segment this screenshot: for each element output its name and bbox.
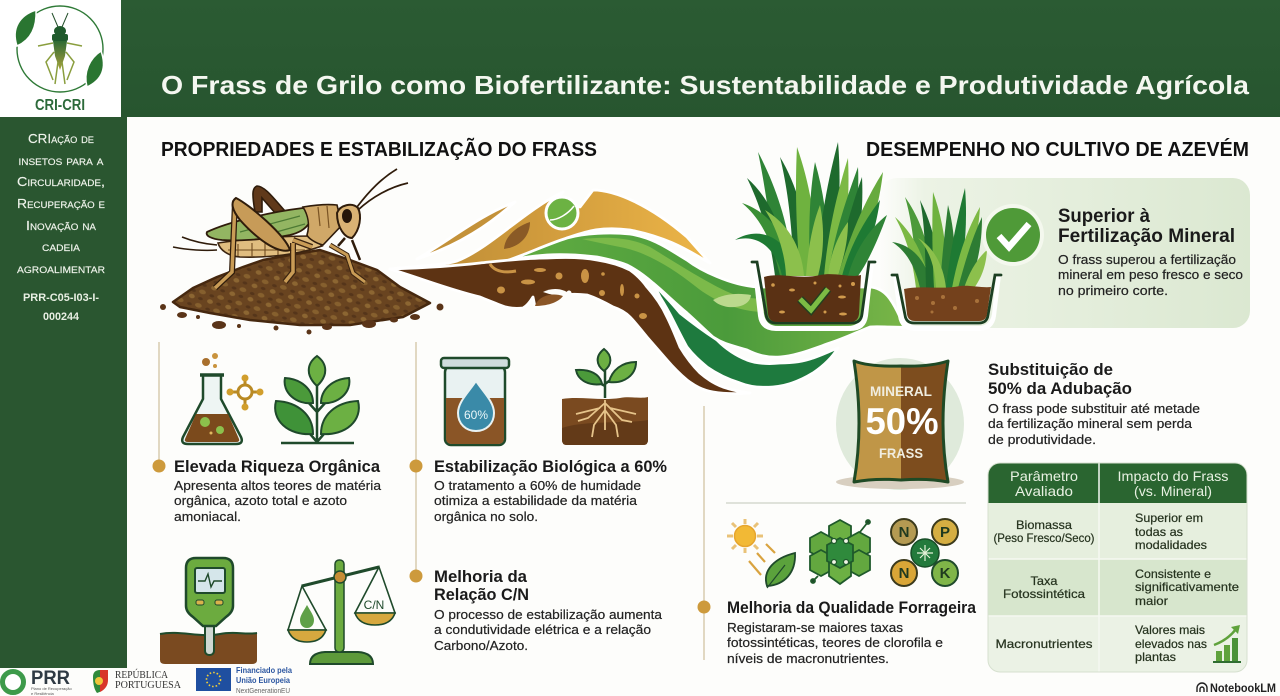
row: macronutrientes: Valores mais [1135,623,1205,637]
icon: plant [275,356,359,443]
panel: superior content [735,142,1243,331]
divider [726,502,966,504]
item: elevada riqueza organica [152,353,382,524]
bullet [410,460,422,472]
icon: balance C/N: C/N [364,598,384,612]
icon: jar with droplet: 60% [464,408,488,422]
row: taxa fotossintetica: Fotossintética [1003,587,1085,601]
text: superior: mineral em peso fresco e seco [1058,267,1243,282]
sidebar text: agroalimentar [17,261,106,276]
text block: O processo de estabilização aumenta [434,607,663,622]
text block: Registaram-se maiores taxas [727,620,904,635]
icon: fertiliser bag: MINERAL [870,383,932,399]
text block: Carbono/Azoto. [434,638,528,653]
sidebar text [17,131,106,323]
text: superior: O frass superou a fertilização [1058,252,1236,267]
icon: fertiliser bag [836,358,964,490]
icon: conductivity meter in soil [160,558,257,664]
heading: properties: PROPRIEDADES E ESTABILIZAÇÃO DO FRASS [161,138,597,161]
table header: (vs. Mineral) [1134,483,1212,499]
illustration: flowing ribbon from frass to plants [390,190,910,394]
icon: rising bars [1213,625,1241,662]
text: superior: Superior à [1058,206,1150,227]
heading: performance: DESEMPENHO NO CULTIVO DE AZEVÉM [866,138,1249,161]
row: biomassa: (Peso Fresco/Seco) [994,531,1094,545]
icon: NPK nutrients: P [940,524,950,541]
sidebar text: cadeia [42,239,80,254]
row: biomassa: Biomassa [1016,518,1072,532]
icon: NPK nutrients: K [940,565,951,582]
table header: Impacto do Frass [1118,468,1228,484]
text block: Apresenta altos teores de matéria [174,478,382,493]
text block: otimiza a estabilidade da matéria [434,493,638,508]
logo: Republica Portuguesa: REPÚBLICA [115,669,168,681]
text block [174,457,382,524]
row: taxa fotossintetica: significativamente [1135,580,1239,594]
text block: 50% da Adubação [988,379,1132,398]
text block [434,457,667,524]
text block: fotossintéticas, teores de clorofila e [727,635,943,650]
title: O Frass de Grilo como Biofertilizante: Sustentabilidade e Produtividade Agrícola [161,70,1250,100]
text block: O tratamento a 60% de humidade [434,478,641,493]
text block: orgânica no solo. [434,509,538,524]
row: macronutrientes [996,623,1207,664]
item: substituicao 50% [836,358,1200,490]
logo: EU flag: União Europeia [236,675,290,685]
icon: balance C/N [288,560,395,664]
NotebookLM mark: NotebookLM [1210,683,1276,695]
sidebar text: insetos para a [18,153,104,168]
text: superior: Fertilização Mineral [1058,226,1235,247]
icon: NPK nutrients [891,519,958,586]
row: taxa fotossintetica [1003,567,1239,608]
logo: PRR: PRR [31,668,70,689]
row: macronutrientes: plantas [1135,650,1176,664]
table header: Parâmetro [1010,468,1078,484]
logo: PRR: Plano de Recuperação [31,686,72,691]
header banner [121,0,1280,117]
sidebar text: Recuperação e [17,196,105,211]
row: biomassa: Superior em [1135,511,1203,525]
logo: PRR [2,668,72,696]
table header [1010,468,1228,499]
text block: O frass pode substituir até metade [988,401,1200,416]
text block: da fertilização mineral sem perda [988,416,1193,431]
text block: a condutividade elétrica e a relação [434,622,651,637]
row: taxa fotossintetica: Consistente e [1135,567,1211,581]
text block: Estabilização Biológica a 60% [434,457,667,476]
text: superior [1058,206,1243,298]
bullet [152,460,166,472]
text: superior: no primeiro corte. [1058,283,1168,298]
icon: check badge [982,204,1044,266]
text block: Relação C/N [434,585,529,604]
sidebar text: Inovação na [26,218,96,233]
icon: jar with droplet [441,358,509,445]
timeline lines [159,342,704,660]
icon: chlorophyll molecule [810,520,870,584]
text block [988,360,1200,447]
text block: amoniacal. [174,509,241,524]
bullet [698,600,710,614]
row: taxa fotossintetica: maior [1135,594,1168,608]
text block: Melhoria da Qualidade Forrageira [727,598,976,617]
sidebar text: CRIação de [28,131,94,146]
logo: EU flag: Financiado pela [236,665,292,675]
panel: superior background [880,178,1250,328]
logo: Republica Portuguesa [93,669,181,693]
illustration: cricket on frass pile [160,169,444,334]
text block [727,598,976,666]
row: biomassa: todas as [1135,525,1183,539]
sidebar panel [0,117,127,668]
icon: fertiliser bag: 50% [866,401,938,442]
icon: flask [182,353,264,444]
text block: orgânica, azoto total e azoto [174,493,347,508]
illustration: ryegrass pot with mineral fertiliser [892,188,1001,331]
icon: seedling with roots [562,349,648,445]
row: macronutrientes: elevados nas [1135,637,1207,651]
sidebar text: Circularidade, [17,174,105,189]
text block: Elevada Riqueza Orgânica [174,457,381,476]
sidebar text: PRR-C05-I03-I- [23,292,99,304]
item: melhoria relacao C/N [160,558,663,664]
bullet [410,570,422,582]
icon: NPK nutrients: N [899,524,909,541]
row: macronutrientes: Macronutrientes [996,637,1092,651]
sidebar text: 000244 [43,311,80,323]
row: taxa fotossintetica: Taxa [1030,574,1058,588]
icon: fertiliser bag: FRASS [879,445,923,461]
row: biomassa [994,511,1207,552]
comparison table [988,463,1247,672]
text block: Substituição de [988,360,1113,379]
text block: Melhoria da [434,567,528,586]
item: estabilizacao biologica [410,349,667,524]
table header: Avaliado [1015,483,1073,499]
logo: EU flag [196,665,292,695]
ribbon details: leaf badge and frass flecks [490,197,765,319]
illustration: ryegrass pot with frass [735,142,887,331]
text block: níveis de macronutrientes. [727,651,889,666]
icon: sun and leaf [727,519,795,588]
logo: CRI-CRI [0,0,121,117]
row: biomassa: modalidades [1135,538,1207,552]
logo: CRI-CRI: CRI-CRI [35,97,85,114]
logo: Republica Portuguesa: PORTUGUESA [115,679,181,691]
item: qualidade forrageira [698,519,976,666]
text block: de produtividade. [988,432,1096,447]
icon: NPK nutrients: N [899,565,909,582]
text block [434,567,663,653]
logo: EU flag: NextGenerationEU [236,686,290,695]
footer logos [2,665,292,696]
logo: PRR: e Resiliência [31,691,54,696]
